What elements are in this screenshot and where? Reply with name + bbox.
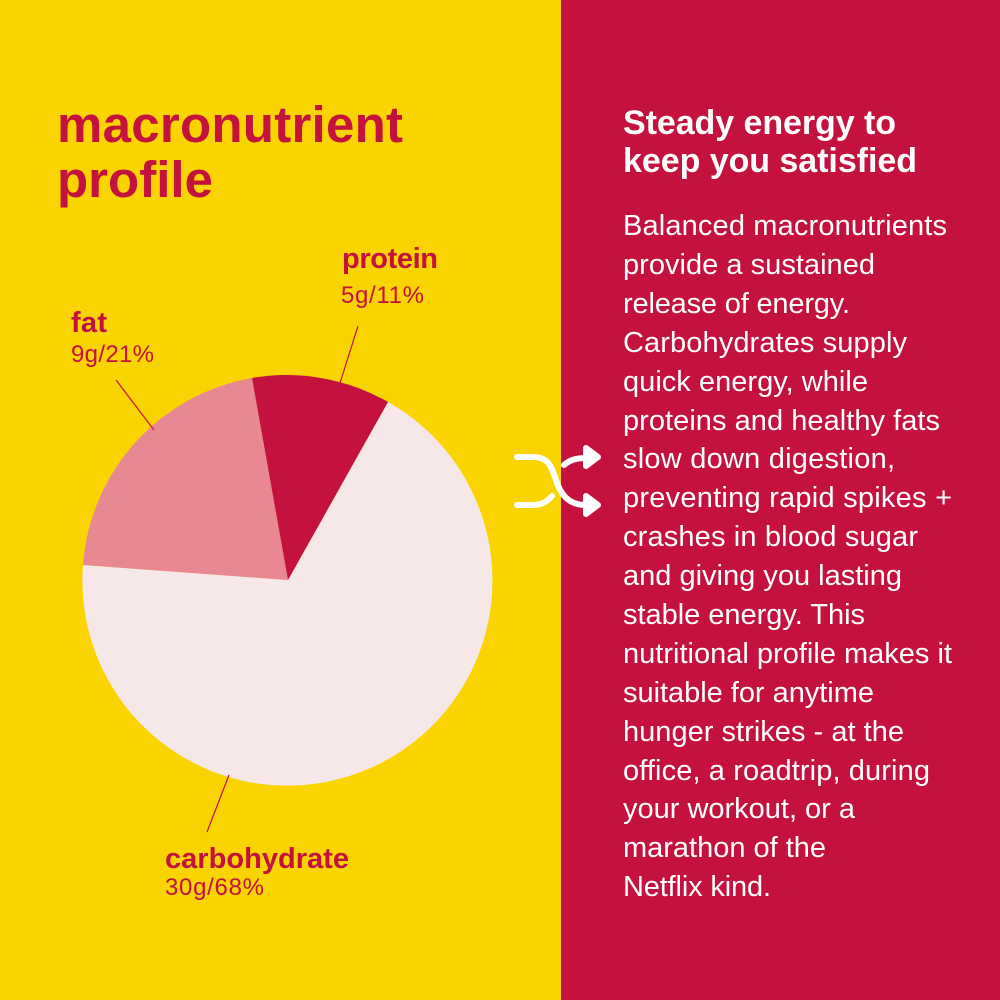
body text: stable energy. This [623,599,865,631]
body text [623,210,952,903]
leader line: carbohydrate [207,775,229,832]
leader line: fat [116,380,154,430]
body text: Carbohydrates supply [623,327,908,359]
body text: Balanced macronutrients [623,210,947,242]
body text: suitable for anytime [623,677,874,709]
panel: yellow left background [0,0,562,1000]
pie slice: carbohydrate [82,402,492,786]
body text: your workout, or a [623,793,856,825]
body text: release of energy. [623,288,850,320]
body text: preventing rapid spikes + [623,482,952,514]
body text: Netflix kind. [623,871,771,903]
title [57,96,403,208]
title: profile [57,151,213,208]
pie chart [82,375,492,786]
pie slice: fat [83,378,288,580]
body text: provide a sustained [623,249,875,281]
label: carbohydrate: carbohydrate [165,843,349,875]
body text: crashes in blood sugar [623,521,918,553]
label: protein: protein [342,243,438,275]
heading: steady energy: Steady energy to [623,104,896,142]
body text: slow down digestion, [623,443,895,475]
leader line: protein [340,326,358,383]
body text: and giving you lasting [623,560,902,592]
heading: steady energy [623,104,917,180]
label: protein: 5g/11% [341,282,424,309]
body text: nutritional profile makes it [623,638,952,670]
pie slice: protein [252,375,388,580]
label: carbohydrate: 30g/68% [165,874,264,901]
body text: office, a roadtrip, during [623,755,930,787]
body text: proteins and healthy fats [623,405,940,437]
body text: quick energy, while [623,366,868,398]
body text: marathon of the [623,832,826,864]
heading: steady energy: keep you satisfied [623,142,917,180]
title: macronutrient [57,96,403,153]
label: fat: fat [71,307,107,339]
label: carbohydrate [165,843,349,901]
body text: hunger strikes - at the [623,716,904,748]
label: fat: 9g/21% [71,341,154,368]
panel: crimson right background [561,0,1000,1000]
label: fat [71,307,154,368]
label: protein [341,243,438,309]
icon: shuffle arrows [517,448,598,514]
